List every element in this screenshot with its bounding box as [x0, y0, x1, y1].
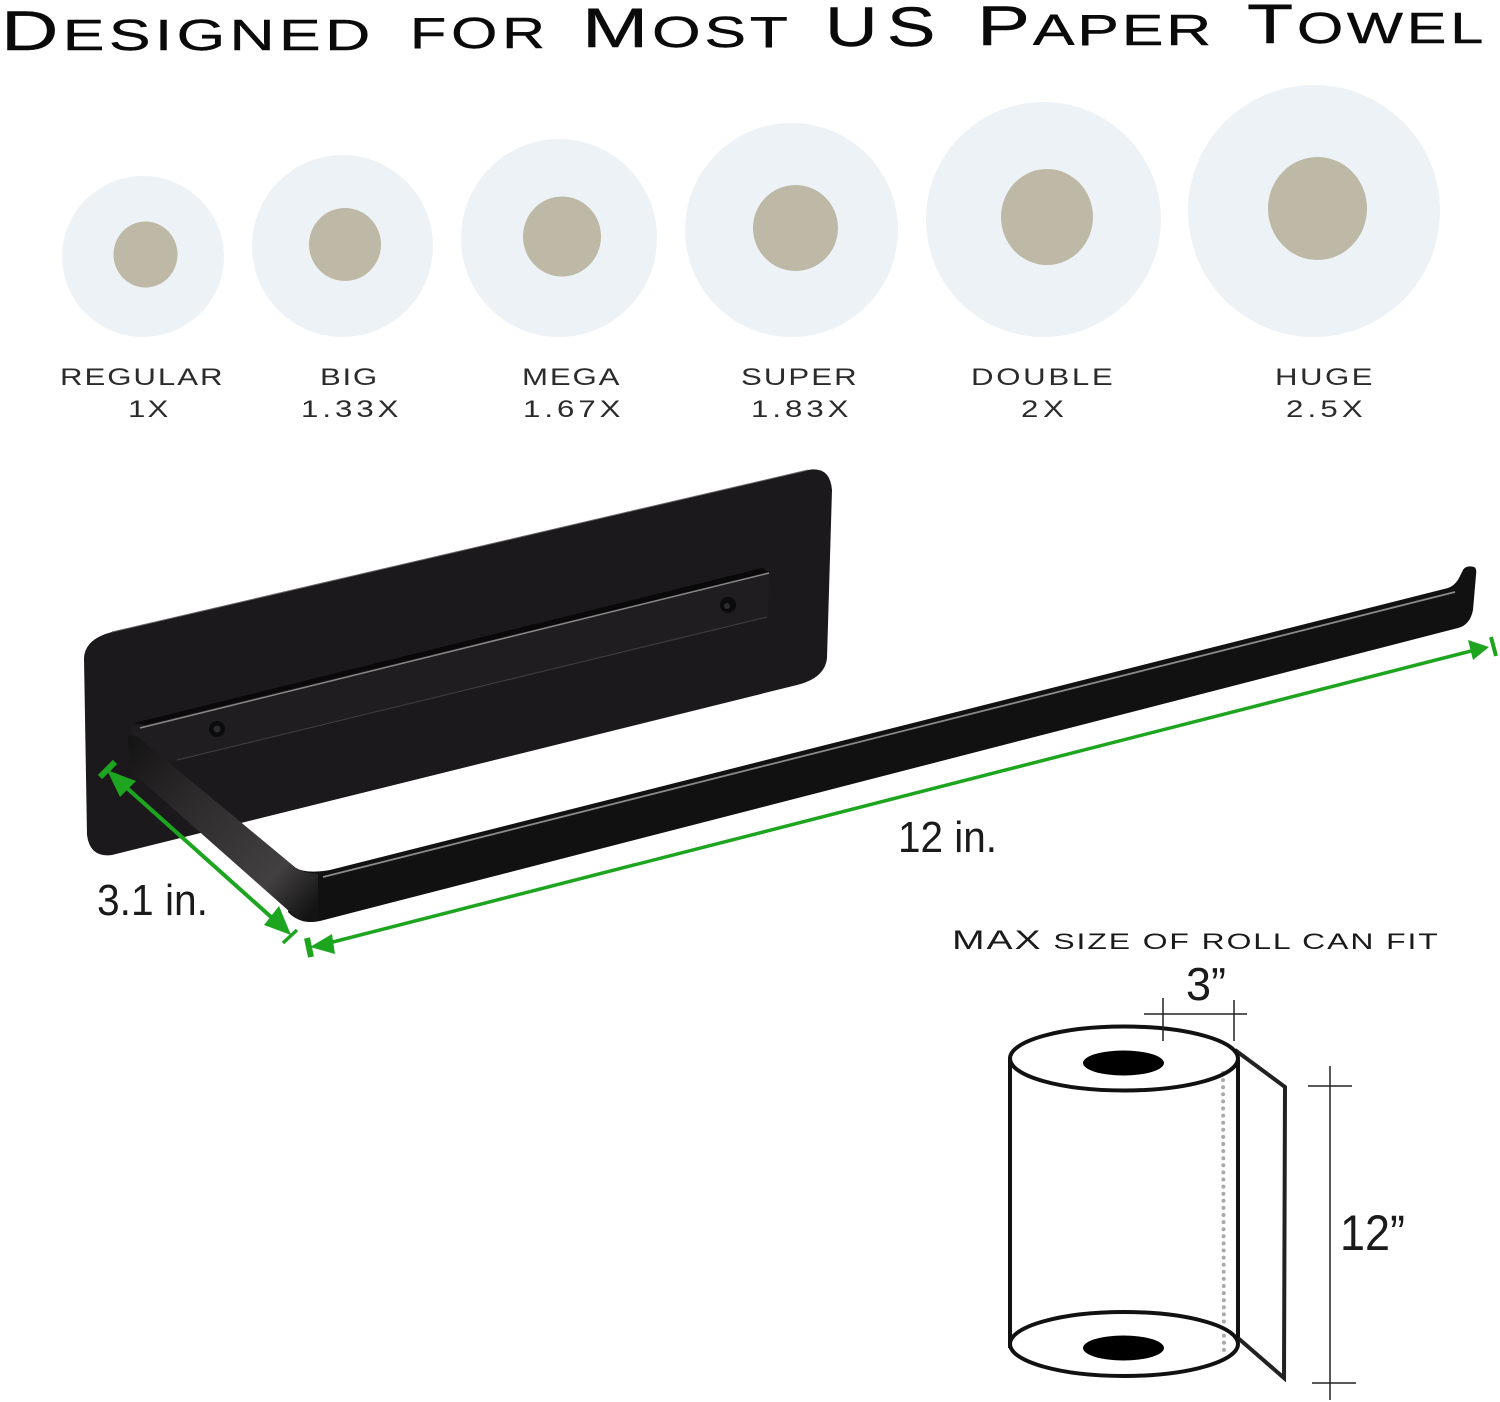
roll size: huge: HUGE	[1275, 363, 1372, 390]
label: 3.1 in: 3.1 in.	[97, 876, 208, 925]
title	[1, 0, 1483, 62]
roll size: huge	[1188, 85, 1440, 422]
roll size: regular	[60, 176, 224, 422]
bottom core hole	[1083, 1336, 1164, 1360]
roll size: big: BIG	[320, 363, 377, 390]
black towel holder	[84, 469, 1476, 922]
roll body	[1010, 1058, 1238, 1348]
roll size: mega: MEGA	[522, 363, 620, 390]
plate top edge highlight	[112, 470, 808, 632]
side arm	[128, 735, 318, 922]
roll size: big	[252, 155, 433, 422]
label: 12 in: 12 in.	[898, 813, 997, 862]
heading: max roll size: MAX SIZE OF ROLL CAN FIT	[952, 926, 1438, 955]
label: 3 inch: 3”	[1186, 958, 1226, 1010]
rail highlight	[323, 592, 1455, 877]
dimension lines: 3 inch	[1144, 998, 1247, 1041]
title: FOR	[410, 9, 545, 58]
roll top	[1010, 1026, 1238, 1090]
roll size: double: 2X	[1021, 395, 1064, 422]
roll size: super	[685, 123, 898, 422]
roll bottom	[1010, 1312, 1238, 1376]
roll size: huge: 2.5X	[1286, 395, 1363, 422]
rail bar	[288, 566, 1476, 922]
roll size: super: SUPER	[741, 363, 857, 390]
roll size: double	[926, 102, 1161, 422]
wall plate	[84, 469, 832, 855]
roll size: super: 1.83X	[751, 395, 848, 422]
dimension arrow: 3.1 in	[100, 762, 297, 943]
roll size: big: 1.33X	[301, 395, 398, 422]
paper towel roll diagram	[1010, 1026, 1285, 1378]
roll size: regular: 1X	[128, 395, 168, 422]
label: 12 inch: 12”	[1340, 1205, 1405, 1261]
top core hole	[1083, 1050, 1164, 1076]
roll size: double: DOUBLE	[971, 363, 1113, 390]
title: DESIGNED	[1, 0, 370, 62]
dimension lines: 12 inch	[1308, 1066, 1356, 1400]
perforation dots	[1223, 1073, 1224, 1354]
roll size: mega: 1.67X	[523, 395, 620, 422]
roll size: regular: REGULAR	[60, 363, 223, 390]
roll size: mega	[461, 139, 657, 422]
mounting bracket	[130, 568, 769, 770]
dimension arrow: 12 in	[307, 637, 1496, 957]
loose sheet	[1235, 1050, 1285, 1378]
